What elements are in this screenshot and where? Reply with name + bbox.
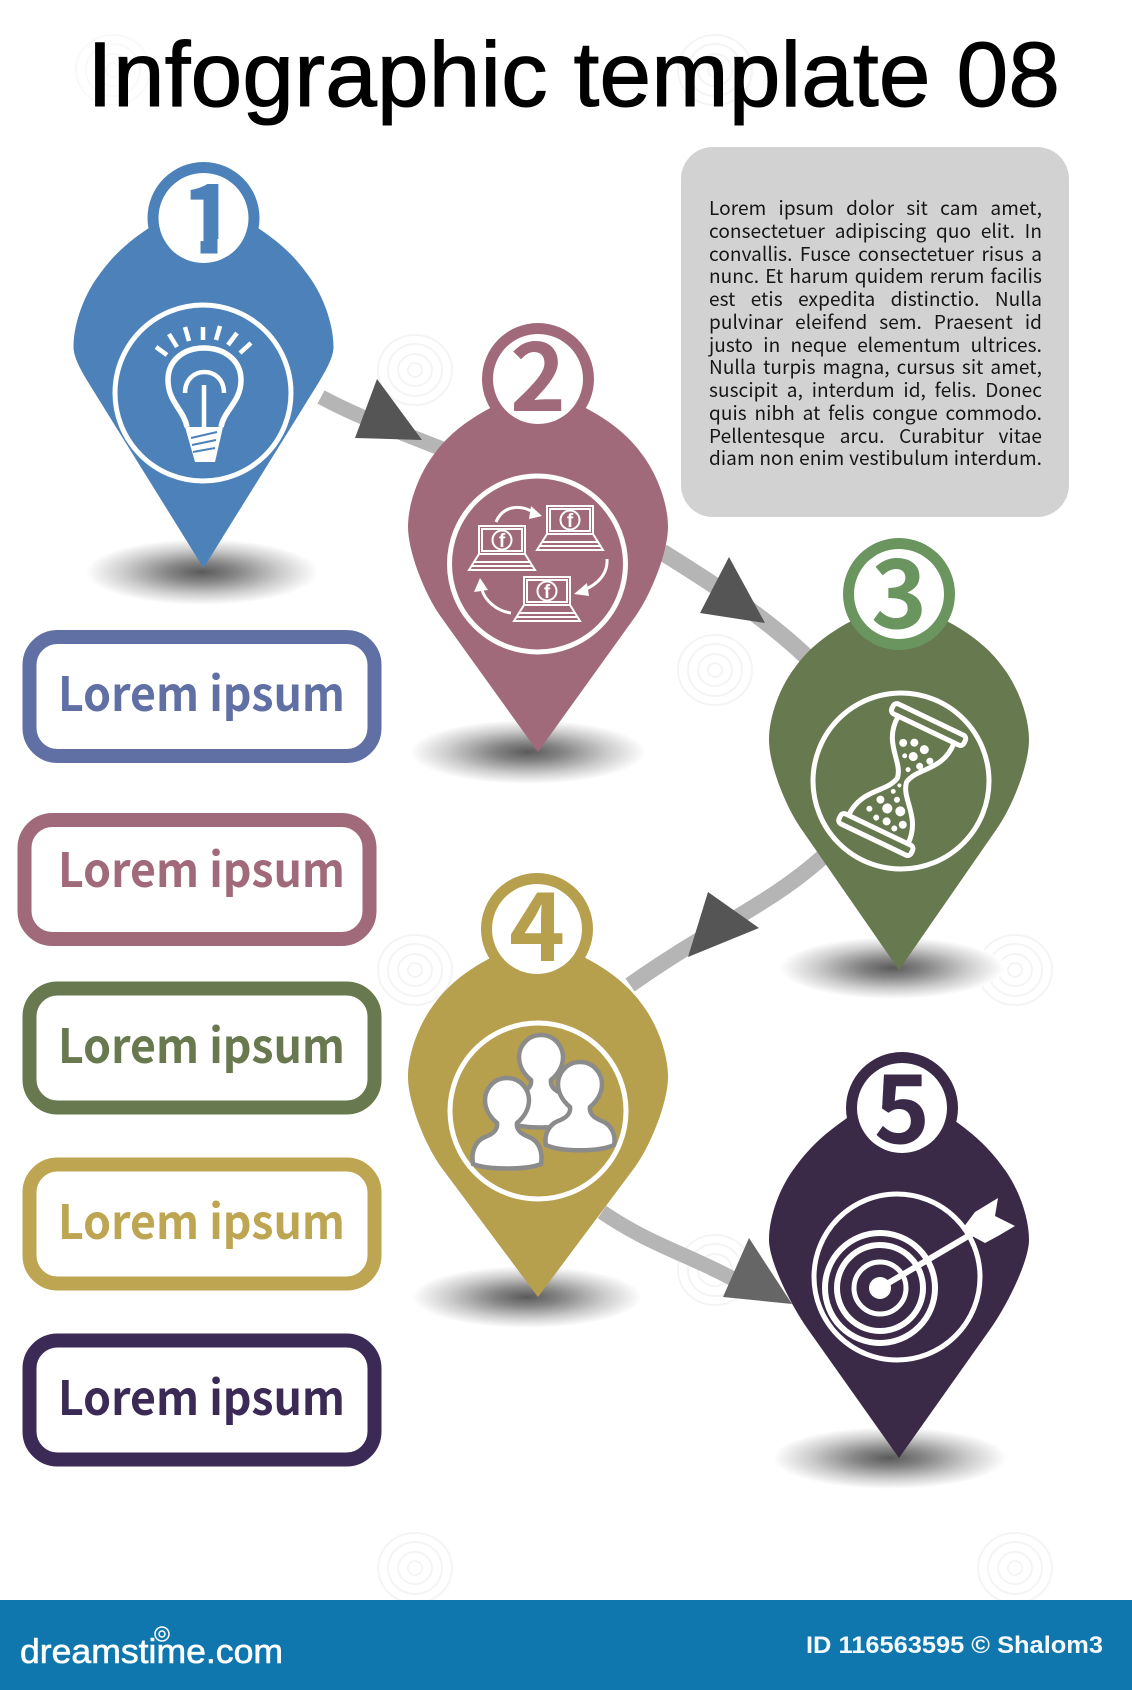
text block: lorem paragraph: consectetuer adipiscing quo elit. In — [709, 217, 1042, 244]
title: Infographic template 08 — [87, 24, 1060, 126]
pin 3: time — [769, 519, 1029, 970]
text block: lorem paragraph: Nulla turpis magna, cursus sit amet, — [709, 353, 1042, 380]
panel: grey text background — [681, 147, 1069, 517]
arrow: step 2 to step 3 — [662, 552, 815, 665]
label box 2 — [24, 820, 370, 939]
text block: lorem paragraph: nunc. Et harum quidem rerum facilis — [709, 262, 1042, 289]
laptop B: f — [567, 511, 574, 532]
arrow: step 4 to step 5 — [602, 1212, 792, 1304]
laptop B — [537, 506, 603, 550]
number badge 2 — [482, 302, 594, 439]
number badge 1: 1 — [181, 144, 237, 281]
text block: lorem paragraph: diam non enim vestibulum interdum. — [709, 444, 1042, 471]
arrow: step 1 to step 2 — [321, 379, 445, 450]
pin 4: people — [408, 852, 668, 1297]
number badge 2: 2 — [510, 302, 566, 439]
label box 4 — [30, 1164, 374, 1284]
label box 5: Lorem ipsum — [58, 1360, 345, 1429]
footer logo: dreamstime.com — [20, 1633, 283, 1671]
icon: light bulb — [115, 305, 291, 481]
label box 1 — [30, 637, 374, 756]
laptop C: f — [544, 582, 551, 603]
footer credit: ID 116563595 © Shalom3 — [806, 1632, 1103, 1659]
label box 3 — [30, 988, 374, 1108]
laptop A — [469, 526, 535, 570]
text block: lorem paragraph: Pellentesque arcu. Curabitur vitae — [709, 422, 1042, 448]
number badge 4 — [481, 852, 593, 989]
label box 3: Lorem ipsum — [58, 1008, 345, 1077]
text block: lorem paragraph: quis nibh at felis congue commodo. — [709, 399, 1042, 426]
number badge 3 — [843, 519, 955, 656]
text block: lorem paragraph — [708, 194, 1042, 471]
text block: lorem paragraph: Lorem ipsum dolor sit cam amet, — [709, 194, 1042, 221]
number badge 4: 4 — [509, 852, 565, 989]
footer bar — [0, 1600, 1132, 1690]
text block: lorem paragraph: justo in neque elementum ultrices. — [709, 330, 1042, 358]
text block: lorem paragraph: suscipit a, interdum id, felis. Donec — [709, 376, 1042, 403]
number badge 5: 5 — [874, 1034, 930, 1171]
arrow: step 3 to step 4 — [630, 855, 825, 985]
number badge 3: 3 — [871, 519, 927, 656]
text block: lorem paragraph: convallis. Fusce consectetuer risus a — [709, 240, 1042, 266]
icon: target with arrow — [814, 1194, 1015, 1360]
icon: group of people — [450, 1023, 626, 1199]
number badge 1 — [148, 162, 260, 263]
icon: hourglass — [813, 693, 989, 869]
text block: lorem paragraph: est etis expedita distinctio. Nulla — [709, 285, 1042, 312]
label box 2: Lorem ipsum — [58, 832, 345, 901]
number badge 5 — [846, 1034, 958, 1171]
shadows under pins — [86, 539, 1007, 1489]
laptop A: f — [499, 531, 506, 552]
text block: lorem paragraph: pulvinar eleifend sem. Praesent id — [709, 308, 1042, 335]
label box 4: Lorem ipsum — [58, 1184, 345, 1253]
label box 1: Lorem ipsum — [58, 656, 345, 725]
pin 1: idea — [74, 144, 334, 568]
label box 5 — [30, 1340, 374, 1460]
icon: connected laptops — [450, 476, 626, 652]
laptop C — [514, 577, 580, 621]
pin 5: goal — [769, 1034, 1029, 1458]
curved arrows — [474, 506, 607, 613]
pin 2: network — [408, 302, 668, 752]
